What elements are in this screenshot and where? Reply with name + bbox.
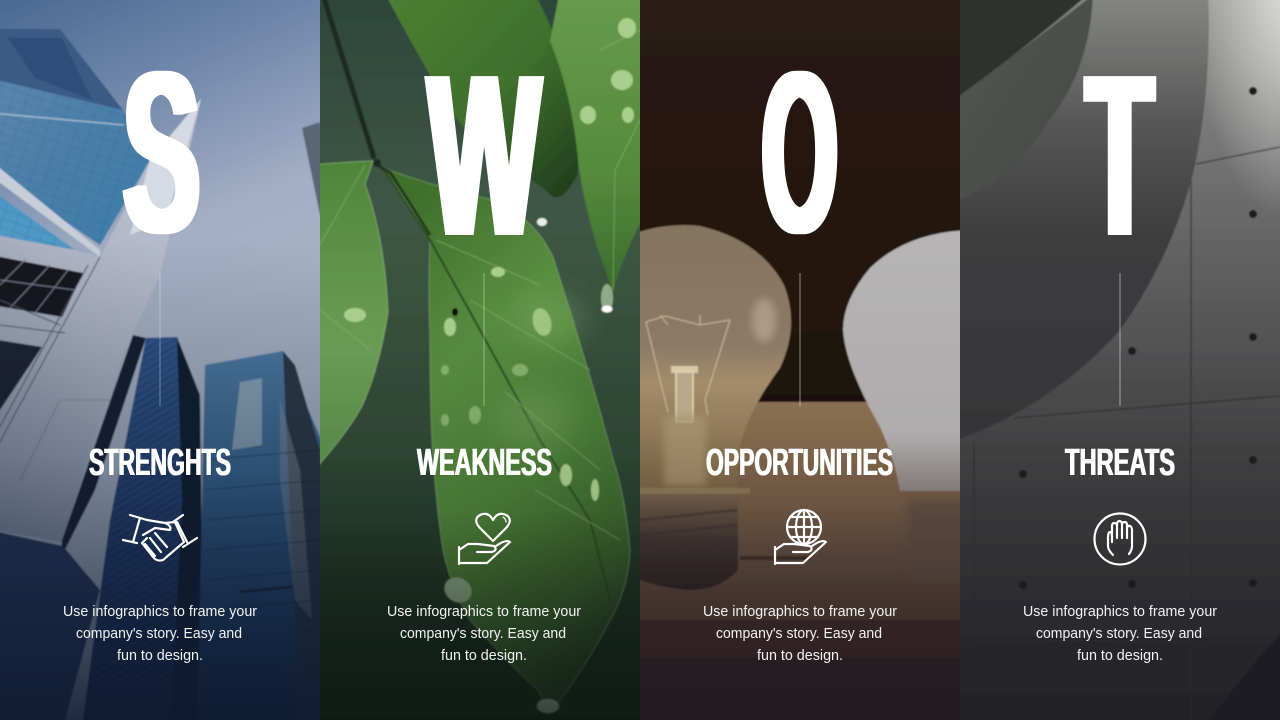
text block: weakness	[387, 604, 581, 664]
letter S: S	[123, 23, 200, 281]
divider line: threats	[1120, 273, 1121, 406]
letter W: W	[428, 26, 541, 284]
text block: weakness: Use infographics to frame your	[387, 604, 581, 620]
text block: threats: company's story. Easy and	[1036, 626, 1202, 642]
shade overlay	[320, 411, 640, 714]
text block: strengths	[63, 604, 257, 664]
photo: light bulbs	[640, 0, 960, 720]
panel: strengths	[0, 0, 340, 720]
divider line: opportunities	[800, 273, 801, 406]
heading: strengths: STRENGHTS	[89, 442, 231, 484]
photo: concrete wall	[940, 0, 1280, 720]
panel: weakness	[320, 0, 640, 720]
icon: raised hand in circle	[1094, 514, 1146, 564]
letter T: T	[1086, 27, 1153, 285]
icon: handshake	[123, 515, 197, 561]
text block: opportunities: fun to design.	[757, 648, 843, 664]
divider line: strengths	[160, 273, 161, 406]
text block: opportunities	[703, 604, 897, 664]
text block: weakness: fun to design.	[441, 648, 527, 664]
text block: threats: fun to design.	[1077, 648, 1163, 664]
text block: strengths: company's story. Easy and	[76, 626, 242, 642]
text block: threats	[1023, 604, 1217, 664]
heading: opportunities: OPPORTUNITIES	[706, 442, 893, 484]
text block: threats: Use infographics to frame your	[1023, 604, 1217, 620]
text block: strengths: fun to design.	[117, 648, 203, 664]
divider line: weakness	[484, 273, 485, 406]
heading: weakness: WEAKNESS	[417, 442, 552, 484]
text block: strengths: Use infographics to frame your	[63, 604, 257, 620]
icon: globe in hand	[775, 510, 826, 564]
text block: opportunities: Use infographics to frame your	[703, 604, 897, 620]
heading: threats: THREATS	[1065, 442, 1175, 484]
letter O: O	[762, 23, 837, 282]
photo: wet green leaves	[320, 0, 640, 714]
shade overlay	[640, 470, 960, 657]
panel: opportunities	[640, 0, 960, 720]
photo: skyscrapers	[0, 0, 340, 720]
icon: heart in hand	[459, 514, 510, 564]
shade overlay	[0, 240, 320, 720]
panel: threats	[940, 0, 1280, 720]
text block: weakness: company's story. Easy and	[400, 626, 566, 642]
text block: opportunities: company's story. Easy and	[716, 626, 882, 642]
